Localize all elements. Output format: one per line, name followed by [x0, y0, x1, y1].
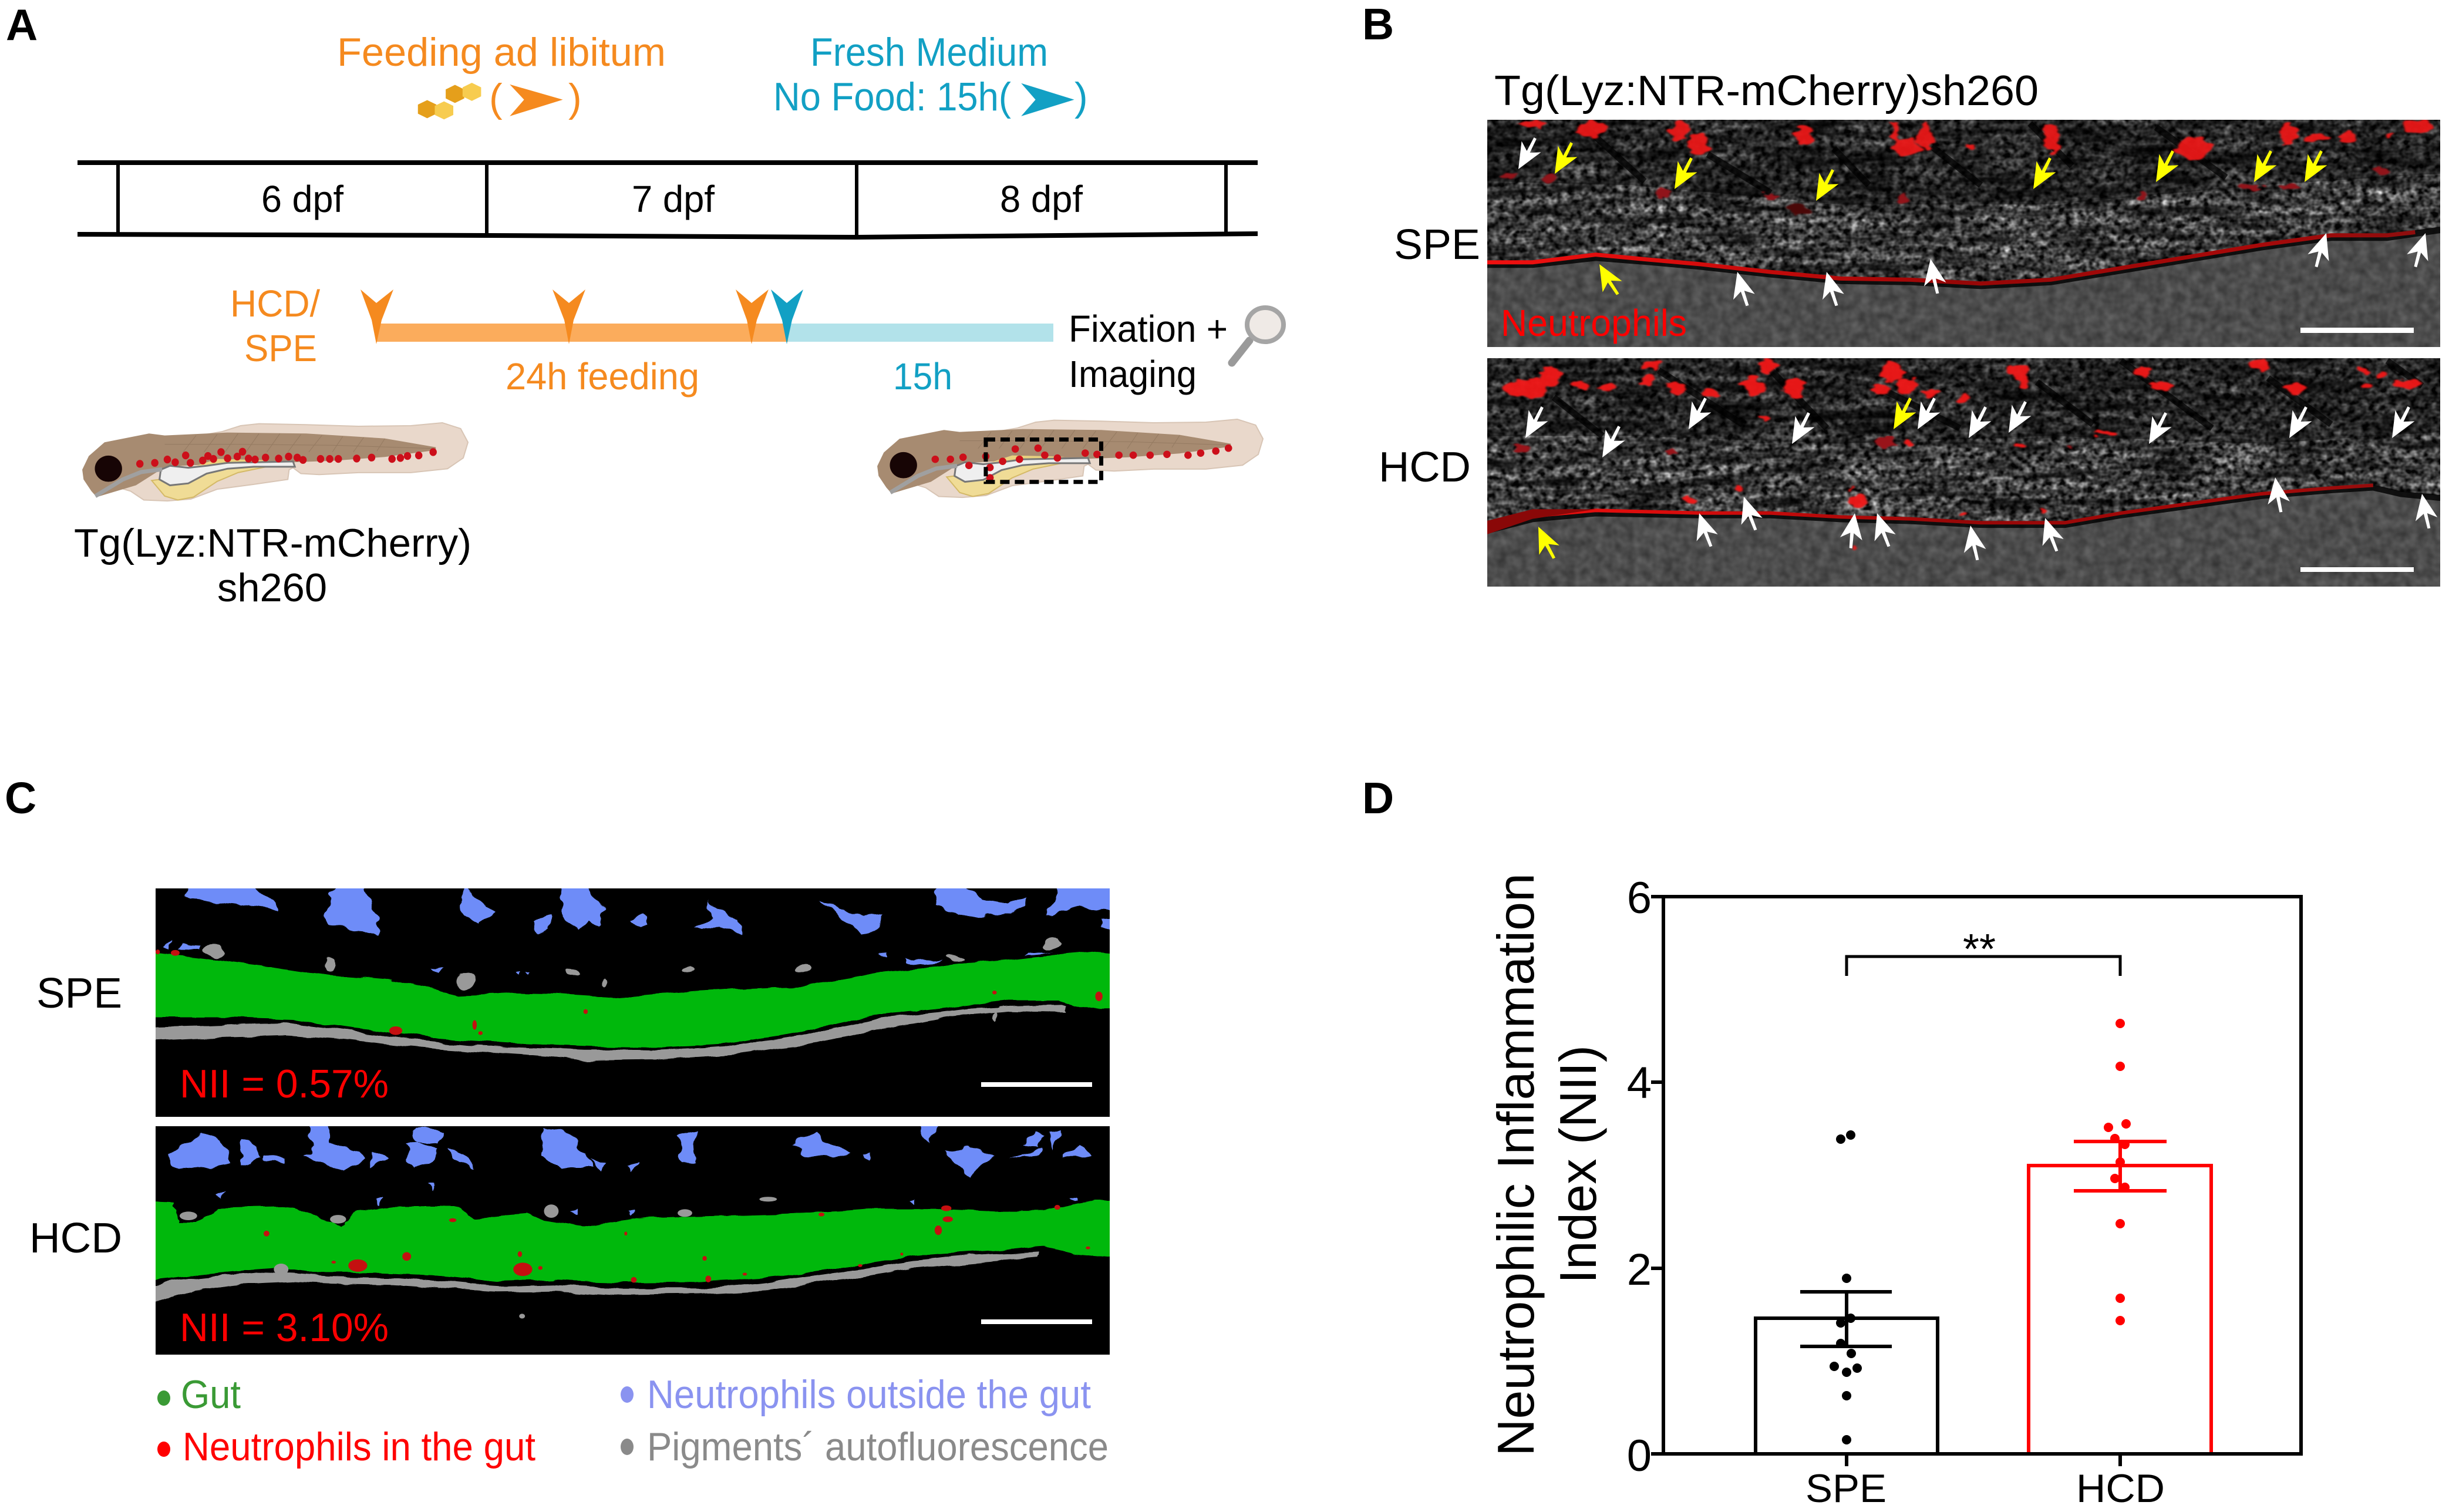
scale bar	[981, 1319, 1092, 1324]
white arrows HCD	[1516, 393, 2439, 562]
HCD data points	[2104, 1019, 2131, 1325]
fish after treatment with imaged region	[877, 419, 1263, 497]
legend item: neutrophils outside the gut: Neutrophils outside the gut	[647, 1372, 1091, 1417]
label: SPE: SPE	[36, 970, 122, 1017]
scale bar	[981, 1082, 1092, 1087]
yellow arrows SPE	[1545, 138, 2332, 300]
icon: orange feeding arrowhead	[510, 85, 563, 116]
y axis title: Neutrophilic Inflammation	[1487, 873, 1545, 1456]
label: HCD/SPE: SPE	[244, 327, 317, 369]
legend item: neutrophils in the gut: Neutrophils in the gut	[183, 1425, 535, 1469]
caption: transgenic line: Tg(Lyz:NTR-mCherry)	[74, 521, 471, 565]
caption: transgenic line: sh260	[217, 565, 327, 610]
micrograph: HCD	[1487, 358, 2440, 587]
feeding time arrowheads	[361, 289, 769, 344]
icon: blue no-food arrowhead	[1021, 83, 1074, 116]
label: HCD/SPE: HCD/	[230, 282, 320, 325]
heading: feeding ad libitum: (	[489, 76, 503, 120]
SPE bar	[1756, 1318, 1938, 1454]
y axis tick labels: 0	[1627, 1431, 1652, 1481]
heading: feeding ad libitum: )	[568, 76, 582, 120]
heading: fresh medium no food: Fresh Medium	[810, 30, 1048, 75]
heading: fresh medium no food: )	[1074, 75, 1088, 119]
heading: fresh medium no food: No Food: 15h(	[773, 75, 1011, 119]
NII value HCD: NII = 3.10%	[180, 1305, 389, 1350]
timeline table of days: 8 dpf	[1000, 178, 1083, 220]
label: Neutrophils: Neutrophils	[1501, 302, 1687, 344]
y axis tick labels	[1627, 873, 1652, 1481]
segmentation map: HCD	[143, 1120, 1124, 1355]
white arrows SPE	[1509, 133, 2436, 309]
timeline table of days	[78, 163, 1258, 237]
label: fixation and imaging: Imaging	[1069, 353, 1197, 395]
y axis title	[1487, 873, 1607, 1456]
label: HCD: HCD	[1379, 444, 1471, 491]
panel A: feeding protocol	[6, 0, 1284, 610]
heading: feeding ad libitum: Feeding ad libitum	[337, 30, 666, 75]
label: fixation and imaging: Fixation +	[1069, 308, 1228, 350]
panel letter C: C	[5, 773, 36, 823]
panel letter A: A	[6, 0, 38, 49]
label: SPE: SPE	[1394, 221, 1480, 268]
significance bracket	[1847, 926, 2120, 976]
medium change arrowhead	[771, 289, 803, 344]
y axis tick labels: 2	[1627, 1245, 1652, 1295]
panel C: segmentation images	[5, 773, 1124, 1469]
panel letter B: B	[1362, 0, 1394, 49]
fish before treatment	[82, 423, 468, 501]
fasting bar	[788, 324, 1053, 342]
micrograph: SPE	[1487, 120, 2440, 347]
scale bar HCD	[2300, 567, 2414, 572]
label: 15h: 15h	[893, 355, 952, 398]
SPE data points	[1830, 1130, 1862, 1444]
label: HCD: HCD	[29, 1215, 122, 1262]
panel B: microscopy images	[1362, 0, 2440, 587]
yellow arrows HCD	[1528, 393, 1921, 563]
heading: feeding ad libitum	[337, 30, 666, 120]
plot frame and ticks	[1651, 897, 2301, 1466]
x axis label SPE: SPE	[1805, 1466, 1887, 1511]
y axis title: Index (NII)	[1549, 1045, 1607, 1284]
label: HCD/SPE	[230, 282, 320, 369]
legend item: pigments autofluorescence: Pigments´ autofluorescence	[647, 1425, 1109, 1469]
legend item: gut	[157, 1372, 241, 1417]
legend item: gut: Gut	[181, 1372, 241, 1417]
panel D: bar chart	[1362, 773, 2301, 1511]
feeding bar	[376, 324, 788, 342]
NII value SPE: NII = 0.57%	[180, 1062, 389, 1106]
label: 24h feeding: 24h feeding	[506, 355, 699, 398]
title: transgenic line: Tg(Lyz:NTR-mCherry)sh260	[1494, 68, 2039, 115]
y axis tick labels: 4	[1627, 1058, 1652, 1108]
HCD error bars	[2074, 1141, 2167, 1191]
scale bar SPE	[2300, 328, 2414, 333]
heading: fresh medium no food	[773, 30, 1088, 119]
significance bracket: **	[1963, 926, 1996, 973]
caption: transgenic line	[74, 521, 471, 610]
x axis label HCD: HCD	[2076, 1466, 2165, 1511]
timeline table of days: 7 dpf	[632, 178, 715, 220]
y axis tick labels: 6	[1627, 873, 1652, 923]
icon: magnifier	[1232, 308, 1284, 363]
icon: food hexagons	[418, 83, 481, 119]
segmentation map: SPE	[143, 883, 1124, 1117]
legend	[157, 1372, 1109, 1469]
timeline table of days: 6 dpf	[261, 178, 343, 220]
SPE error bars	[1800, 1292, 1892, 1346]
HCD bar	[2029, 1166, 2211, 1454]
label: fixation and imaging	[1069, 308, 1228, 395]
panel letter D: D	[1362, 773, 1394, 823]
